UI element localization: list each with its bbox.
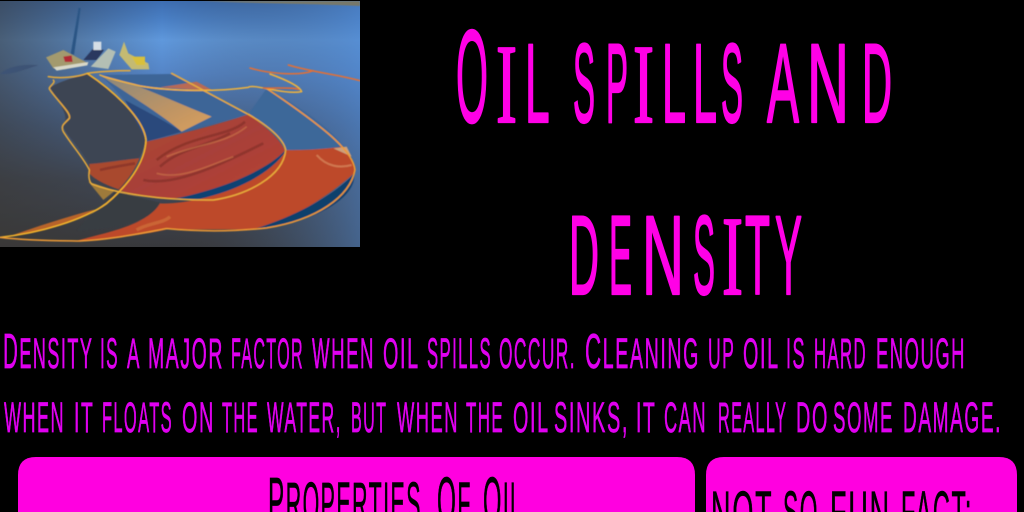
intro line 2: BUT [351,394,387,442]
title line 2: S [693,193,715,318]
intro line 2: CAN [664,394,707,442]
intro line 2: SINKS, [554,394,629,442]
intro line 2: DO [796,394,829,442]
intro line 2: WHEN [4,394,65,442]
intro line 2: SOME [833,394,894,442]
text: D [862,21,892,146]
intro line 1: A [127,330,140,378]
title line 2: I [722,195,743,319]
intro line 1: MAJOR [148,330,224,378]
intro line 2: THE [466,394,504,442]
intro line 1: FACTOR [231,330,304,378]
title line 1: I [496,23,517,147]
intro text block [3,325,1002,442]
title line 1: O [456,3,488,150]
intro line 1: HARD [814,330,867,378]
intro line 1: IS [100,330,119,378]
intro line 1: IS [786,330,806,378]
intro line 1: OCCUR. [499,330,576,378]
title line 1: A [767,21,799,146]
intro line 1: CLEANING [585,325,816,379]
intro line 1: SPILLS [427,330,492,378]
photo: oil spill containment booms on water [0,0,360,250]
title [456,3,892,319]
title line 1: S [721,21,743,146]
intro line 1: UP [708,330,735,378]
intro line 1: OIL [743,330,779,378]
intro line 1: DENSITY [3,325,195,379]
title line 1: P [606,21,628,146]
title line 2: D [569,193,599,318]
title line 1: I [633,23,654,147]
title line 2: E [609,193,632,318]
intro line 2: IT [636,394,656,442]
intro line 2: REALLY [718,394,787,442]
intro line 2: FLOATS [102,394,173,442]
intro line 2: THE [222,394,259,442]
title line 1: S [573,21,595,146]
intro line 1: WHEN [312,330,375,378]
title line 1: L [662,21,686,146]
title line 2: N [642,193,684,318]
title line 1: L [693,21,717,146]
panel: properties of oil [18,457,695,512]
intro line 2: OIL [513,394,549,442]
panel: not so fun fact [706,457,1017,512]
intro line 2: ON [182,394,215,442]
title line 1: L [525,21,548,146]
title: Y [775,193,802,318]
title line 1: N [807,21,849,146]
title line 2: T [745,193,770,318]
intro line 2: IT [74,394,94,442]
intro line 2: WATER, [267,394,342,442]
intro line 1: OIL [383,330,419,378]
intro line 2: WHEN [397,394,459,442]
